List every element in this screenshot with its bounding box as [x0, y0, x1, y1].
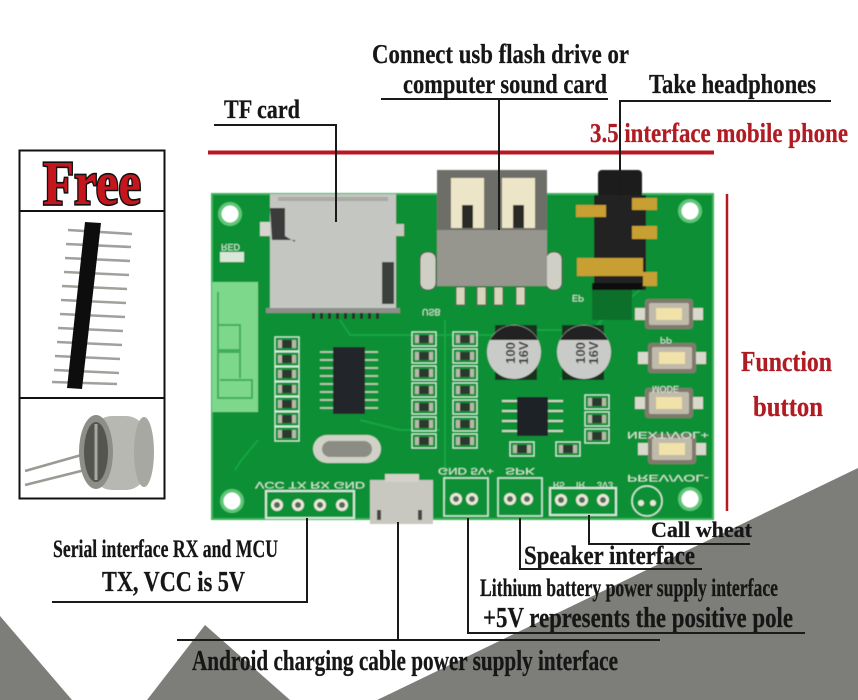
label: Call wheat: Call wheat [651, 517, 753, 542]
buttons: NEXT/VOL+ [627, 430, 709, 440]
main chip [320, 347, 378, 414]
IR header and mic [550, 480, 662, 516]
USB port: USB [422, 307, 441, 317]
battery and speaker headers [438, 466, 542, 516]
label: Speaker interface: Speaker interface [524, 541, 695, 570]
label: Lithium battery: +5V represents the positive pole [483, 603, 793, 634]
headphone jack [572, 170, 657, 320]
capacitors: 16V [516, 341, 531, 365]
label: TF card: TF card [224, 95, 300, 124]
serial header: VCC TX RX GND [255, 480, 366, 490]
antenna [212, 282, 258, 412]
label: Android charging: Android charging cable power supply interface [192, 646, 618, 677]
label: Lithium battery [480, 575, 793, 634]
label: Serial interface: TX, VCC is 5V [102, 567, 245, 598]
SMD components [275, 332, 609, 456]
crystal [313, 435, 381, 463]
label: Serial interface: Serial interface RX and MCU [53, 536, 278, 563]
micro USB port [370, 474, 433, 524]
buttons: PP [660, 335, 672, 345]
circuit board [212, 170, 713, 524]
serial header [255, 480, 366, 518]
leader: Lithium [468, 518, 805, 633]
leader: usb [381, 99, 608, 230]
label: Take headphones: Take headphones [649, 69, 816, 99]
USB port [420, 170, 562, 317]
capacitors [487, 325, 611, 380]
capacitors: 100 [573, 342, 588, 364]
label: Function button [741, 347, 832, 423]
buttons [627, 299, 709, 483]
label: usb flash drive [372, 39, 629, 99]
leader: Call wheat [589, 515, 750, 544]
icon: pin header [52, 222, 132, 389]
background: grey diagonal shapes [0, 468, 858, 700]
RED led [220, 242, 244, 262]
leader: headphones [620, 101, 831, 195]
RED led: RED [221, 242, 241, 252]
battery and speaker headers: SPK [505, 466, 535, 476]
IR header and mic: IR [576, 480, 586, 490]
IR header and mic: 3V3 [597, 480, 613, 490]
capacitors: 100 [503, 342, 518, 364]
leader: Serial [52, 518, 307, 602]
label: Serial interface [53, 536, 278, 598]
IR header and mic: R5 [553, 480, 565, 490]
label: usb flash drive: computer sound card [403, 69, 607, 99]
buttons: PREV/VOL- [627, 473, 709, 483]
battery and speaker headers: GND 5V+ [438, 466, 494, 476]
leader: Android [177, 522, 660, 640]
label: Function button: button [753, 392, 823, 423]
panel: free accessories [19, 150, 164, 498]
icon: microphone [25, 415, 154, 490]
leader: TF card [214, 125, 336, 222]
function bracket [726, 194, 728, 511]
red line [208, 150, 714, 154]
leader: Speaker [520, 518, 702, 569]
capacitors: 16V [586, 341, 601, 365]
headphone jack: EP [572, 293, 584, 303]
buttons: MODE [652, 384, 679, 394]
TF card slot [260, 194, 404, 319]
label: Function button: Function [741, 347, 832, 378]
label: usb flash drive: Connect usb flash drive or [372, 39, 629, 69]
amplifier chip [502, 397, 563, 436]
heading: Free: Free [43, 150, 141, 218]
mounting holes [218, 199, 702, 513]
